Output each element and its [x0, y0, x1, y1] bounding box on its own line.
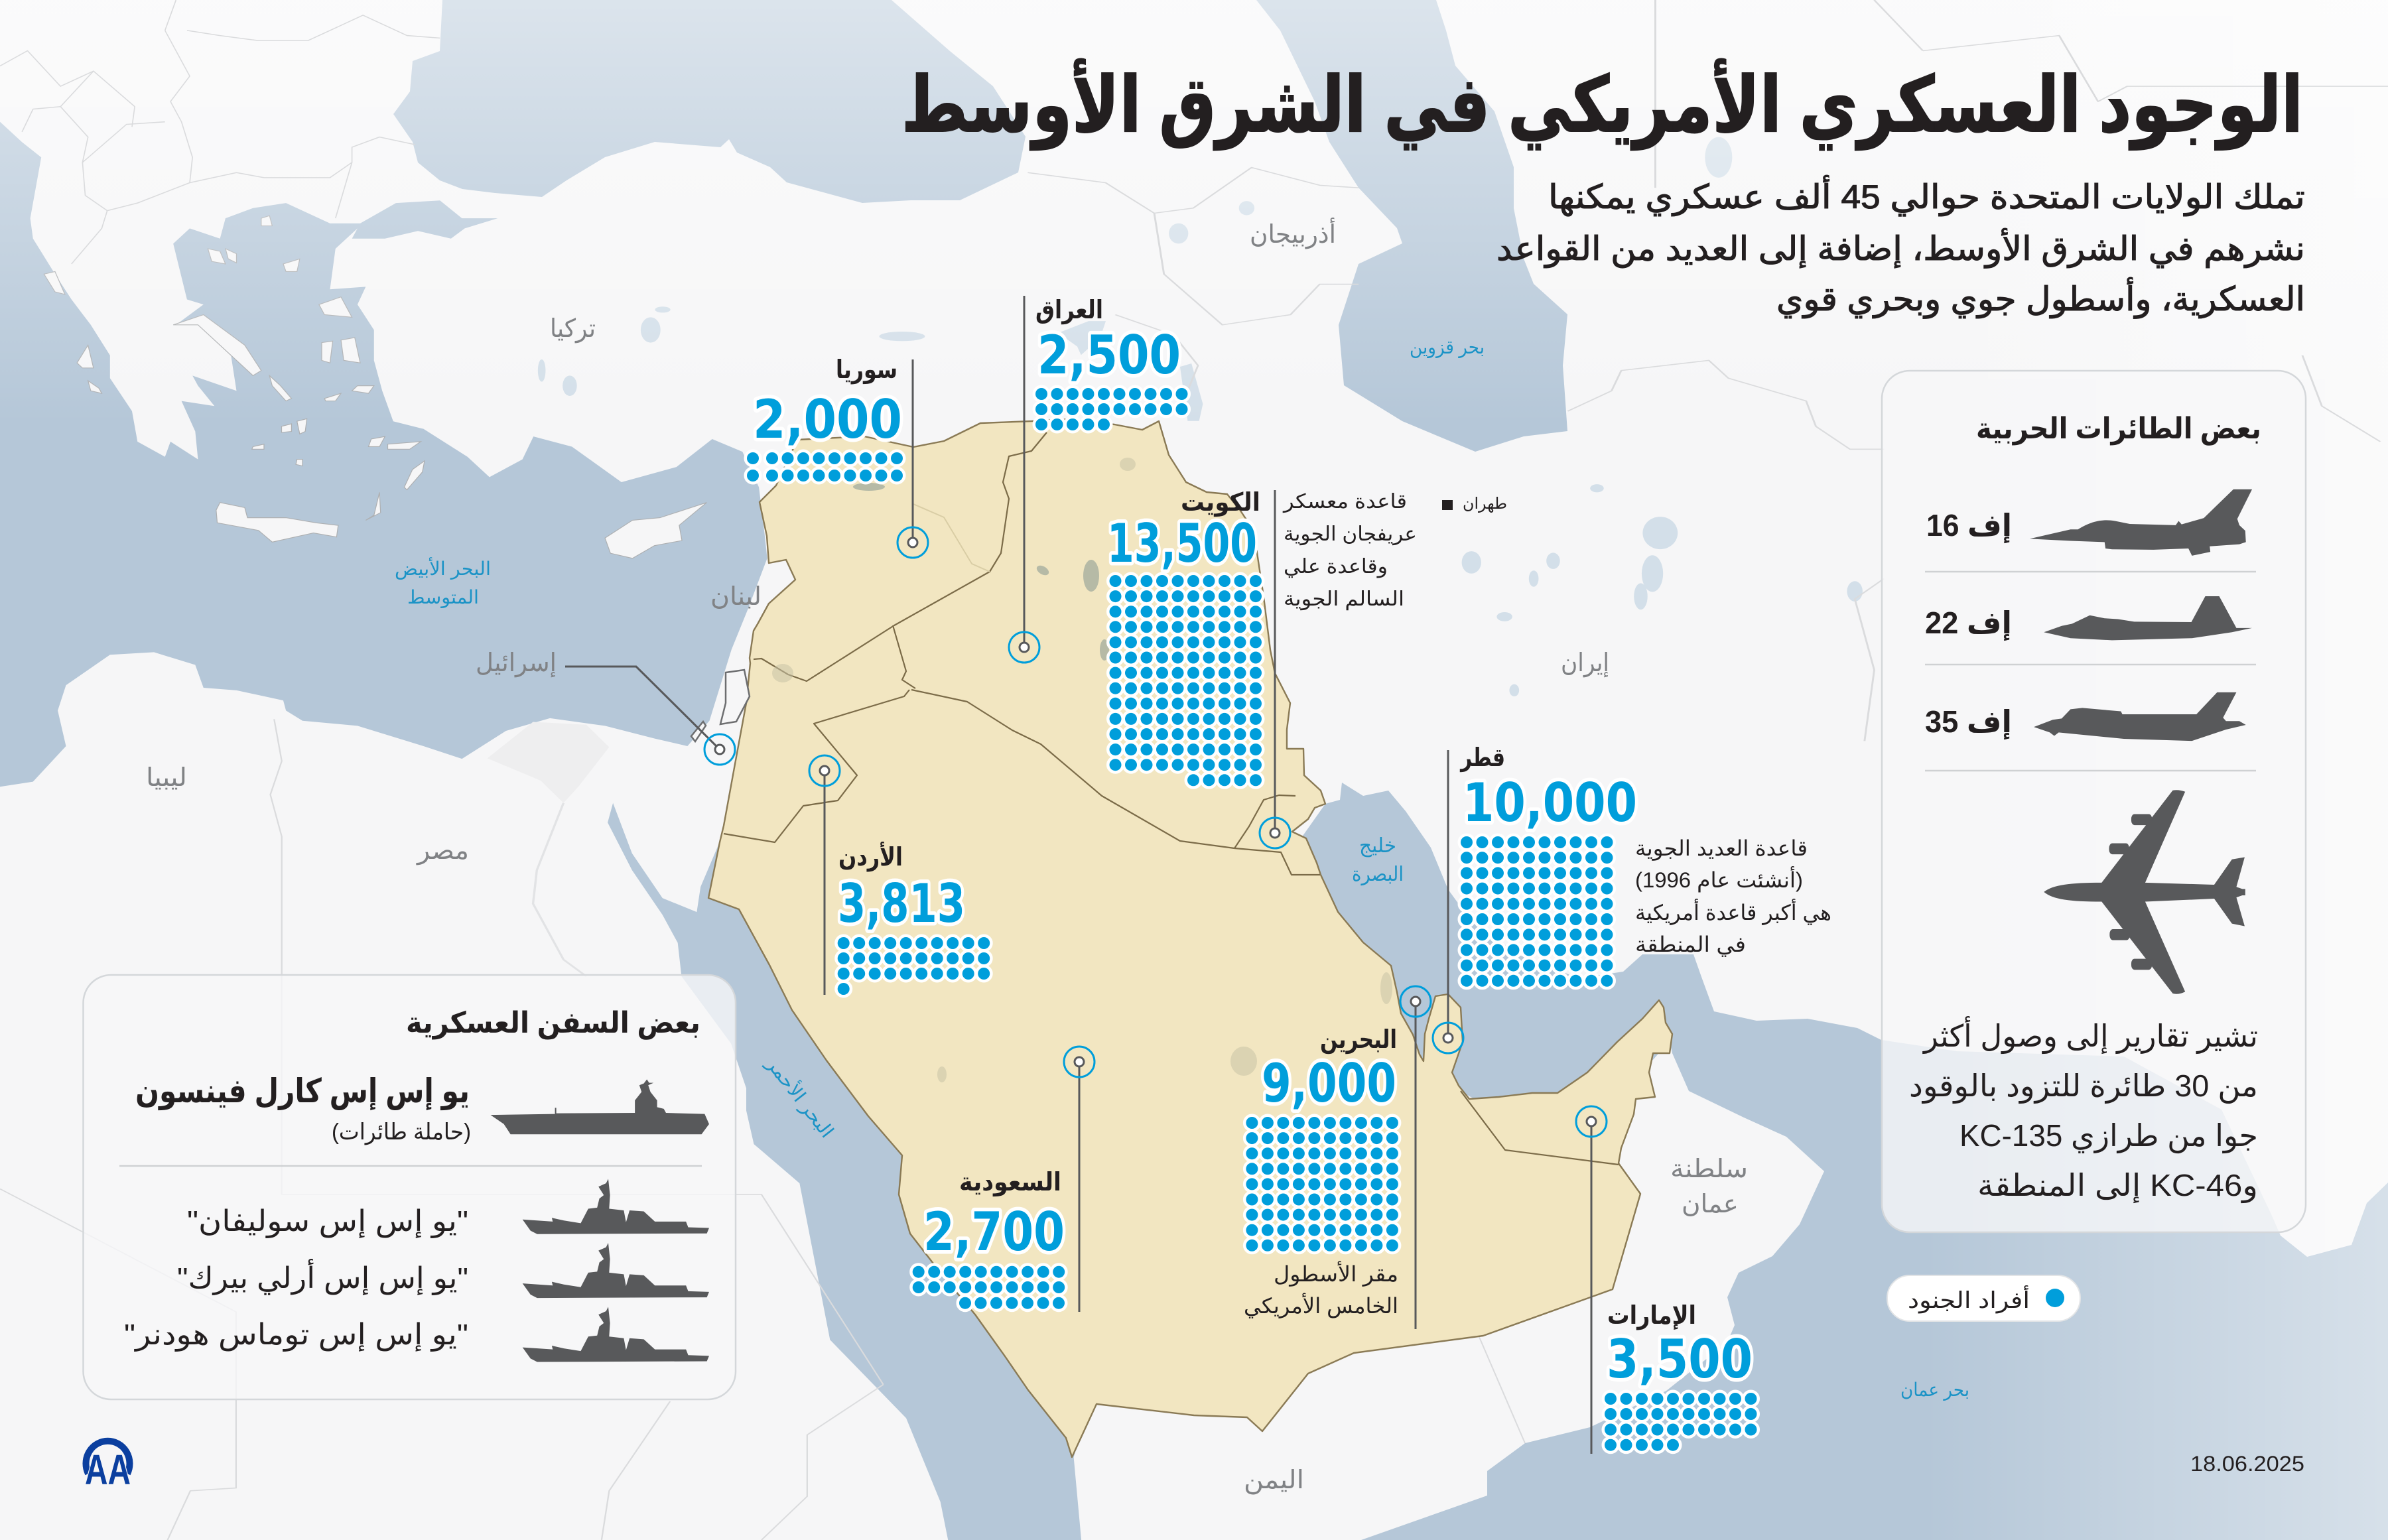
ship: aircraft carrier: (حاملة طائرات) — [332, 1120, 471, 1145]
tanker text — [1909, 1016, 2258, 1204]
callout: Syria: سوريا — [836, 356, 897, 384]
date: 18.06.2025 — [2190, 1452, 2304, 1476]
callout: UAE: الإمارات — [1607, 1302, 1696, 1330]
subtitle text: نشرهم في الشرق الأوسط، إضافة إلى العديد من القواعد — [1496, 228, 2305, 269]
country labels: إسرائيل — [476, 649, 557, 678]
callout: Qatar: قطر — [1459, 744, 1505, 772]
callout: Kuwait: الكويت — [1181, 489, 1260, 517]
callout: Iraq: العراق — [1035, 296, 1103, 324]
ship: USS Sullivan: "يو إس إس سوليفان" — [187, 1205, 468, 1238]
country labels: أذربيجان — [1250, 218, 1336, 249]
ship: USS Thomas Hudner: "يو إس إس توماس هودنر" — [124, 1318, 468, 1352]
callout: Saudi Arabia: السعودية — [959, 1169, 1061, 1196]
tanker text: وKC-46 إلى المنطقة — [1977, 1168, 2258, 1204]
sea: Black Sea — [393, 0, 1026, 203]
sea: Mediterranean and Aegean — [0, 122, 767, 787]
Oman label — [1670, 1155, 1748, 1218]
callout: UAE — [1576, 1106, 1757, 1454]
country labels — [146, 218, 1609, 1495]
subtitle text: العسكرية، وأسطول جوي وبحري قوي — [1776, 277, 2305, 319]
tan region details — [724, 432, 1619, 1165]
callout: Bahrain: مقر الأسطول — [1274, 1261, 1398, 1287]
callout: Kuwait: السالم الجوية — [1284, 588, 1404, 611]
callout: Qatar: قاعدة العديد الجوية — [1635, 836, 1808, 861]
panel: warplanes — [1882, 371, 2306, 1232]
country labels: لبنان — [710, 583, 762, 611]
ship: aircraft carrier — [135, 1072, 709, 1145]
panel heading: ships: بعض السفن العسكرية — [406, 1007, 700, 1040]
subtitle text — [1496, 175, 2305, 319]
callout: Qatar: 10,000 — [1463, 772, 1637, 834]
logo: AA: AA — [85, 1446, 131, 1494]
country labels: تركيا — [550, 315, 596, 344]
callout: Qatar — [1433, 744, 1831, 1053]
sea: Caspian — [1256, 0, 1567, 452]
aircraft: tanker — [2044, 790, 2245, 994]
callout: Jordan — [809, 755, 990, 995]
lakes — [538, 306, 671, 396]
callout: Syria: 2,000 — [753, 389, 902, 450]
islands — [44, 216, 706, 558]
sea labels: خليج — [1359, 835, 1396, 858]
panel: warships — [84, 975, 736, 1399]
callout: UAE: 3,500 — [1607, 1328, 1753, 1390]
tanker text: تشير تقارير إلى وصول أكثر — [1922, 1016, 2258, 1055]
sea labels — [395, 337, 1969, 1401]
sea labels: البحر الأبيض — [395, 556, 491, 580]
callout: Qatar: هي أكبر قاعدة أمريكية — [1635, 899, 1831, 925]
Oman label: سلطنة — [1670, 1155, 1748, 1183]
callout: Israel — [565, 667, 735, 765]
callout: Bahrain: الخامس الأمريكي — [1244, 1293, 1398, 1318]
ship: USS Sullivan — [187, 1179, 709, 1238]
callout: Iraq — [1009, 296, 1187, 663]
callout: Syria — [747, 356, 928, 558]
subtitle text: تملك الولايات المتحدة حوالي 45 ألف عسكري يمكنها — [1548, 175, 2305, 217]
sea labels: البحر الأحمر — [762, 1051, 839, 1142]
aircraft: F-16 — [1926, 489, 2252, 556]
callout: Bahrain: البحرين — [1320, 1026, 1397, 1054]
tanker text: جوا من طرازي KC-135 — [1959, 1118, 2258, 1154]
sea labels: البصرة — [1352, 864, 1404, 885]
aircraft: F-35 — [1925, 692, 2246, 741]
sea labels: بحر عمان — [1900, 1380, 1969, 1401]
callout: Qatar: (أنشئت عام 1996) — [1635, 866, 1803, 893]
ship: aircraft carrier: يو إس إس كارل فينسون — [135, 1072, 470, 1111]
ship: USS Arleigh Burke: "يو إس إس أرلي بيرك" — [177, 1259, 468, 1295]
callout: Kuwait: وقاعدة علي — [1284, 556, 1388, 578]
tanker text: من 30 طائرة للتزود بالوقود — [1909, 1068, 2258, 1104]
country labels: إيران — [1561, 649, 1609, 678]
West Bank outline — [720, 670, 750, 724]
Tehran marker — [1442, 495, 1507, 513]
sea labels: المتوسط — [407, 587, 479, 608]
country labels: ليبيا — [146, 764, 187, 792]
callout: Kuwait: قاعدة معسكر — [1282, 491, 1407, 513]
sea labels: بحر قزوين — [1410, 337, 1485, 358]
callout: Bahrain — [1244, 986, 1431, 1329]
aircraft: F-22 — [1925, 596, 2252, 641]
logo: AA — [85, 1441, 131, 1494]
Tehran marker: طهران — [1463, 495, 1507, 513]
callout: Iraq: 2,500 — [1037, 324, 1181, 386]
Oman label: عمان — [1682, 1190, 1739, 1218]
callout: Kuwait — [1107, 489, 1417, 848]
Nile delta texture — [488, 722, 609, 976]
callout: Kuwait: 13,500 — [1107, 513, 1257, 574]
legend — [1887, 1275, 2080, 1321]
callout: Saudi Arabia: 2,700 — [923, 1201, 1065, 1263]
ship: USS Arleigh Burke — [177, 1243, 709, 1298]
callout: Jordan: الأردن — [838, 841, 903, 871]
callout: Kuwait: عريفجان الجوية — [1284, 523, 1417, 545]
callout: Qatar: في المنطقة — [1635, 932, 1746, 957]
sea: Persian Gulf, Gulf of Oman and Arabian Sea — [1294, 783, 2388, 1540]
callout: Jordan: 3,813 — [838, 873, 965, 934]
country labels: مصر — [416, 837, 469, 866]
ship: USS Thomas Hudner — [124, 1307, 709, 1362]
legend: أفراد الجنود — [1908, 1285, 2030, 1314]
callout: Saudi Arabia — [913, 1047, 1094, 1312]
aircraft: F-16: إف 16 — [1926, 508, 2012, 544]
country labels: اليمن — [1244, 1466, 1304, 1495]
callout: Bahrain: 9,000 — [1262, 1053, 1396, 1114]
tan region: countries hosting US forces — [708, 419, 1672, 1457]
sea: Red Sea — [608, 803, 1142, 1540]
light overlays — [0, 0, 2388, 424]
panel heading: aircraft: بعض الطائرات الحربية — [1976, 413, 2261, 446]
aircraft: F-35: إف 35 — [1925, 704, 2012, 740]
Gaza outline — [691, 722, 706, 741]
aircraft: F-22: إف 22 — [1925, 606, 2012, 641]
